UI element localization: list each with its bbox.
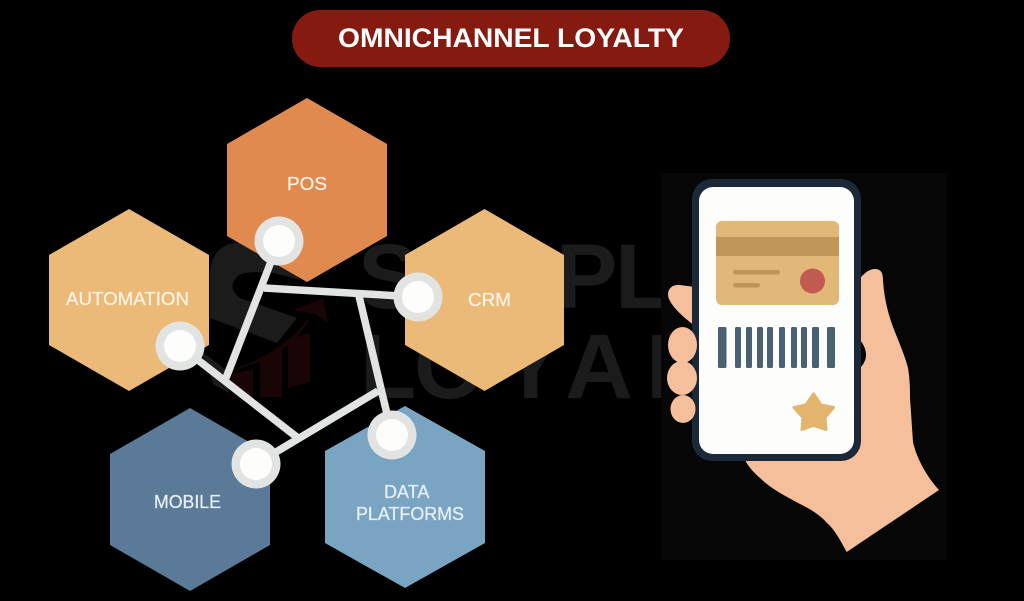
hexagon: POS (227, 98, 387, 282)
loyalty card (716, 221, 839, 305)
watermark: logo and brand name: L (646, 316, 702, 418)
hexagon: Mobile (110, 408, 270, 591)
node: Mobile (232, 440, 280, 488)
node: CRM (394, 272, 442, 322)
barcode (718, 327, 835, 368)
watermark: logo and brand name: L (360, 316, 416, 418)
hexagon: Data Platforms: PLATFORMS (356, 504, 464, 524)
hexagon: CRM: CRM (468, 290, 511, 310)
hexagon: POS: POS (287, 174, 327, 194)
watermark: logo and brand name: S (358, 226, 419, 328)
hexagon: Data Platforms: DATA (384, 482, 429, 502)
watermark: logo and brand name: P (556, 226, 617, 328)
watermark: logo and brand name: O (414, 316, 486, 418)
hexagon: Data Platforms (325, 406, 485, 588)
watermark: logo and brand name: Y (500, 316, 561, 418)
hexagon: CRM (405, 209, 564, 391)
node: Automation (156, 322, 204, 370)
hexagon: Automation (49, 209, 209, 391)
watermark: logo and brand name (200, 226, 702, 418)
hexagon: Automation: AUTOMATION (66, 289, 189, 309)
hand: palm and thumb (745, 269, 939, 552)
hand: index finger (668, 285, 695, 326)
hexagon: Mobile: MOBILE (154, 492, 221, 512)
connector network (180, 241, 418, 464)
phone body (692, 179, 866, 461)
title pill: OMNICHANNEL LOYALTY (338, 23, 684, 53)
icon: star (794, 394, 834, 430)
illustration panel: hand holding phone (661, 173, 947, 560)
title pill (292, 10, 730, 67)
hand: three fingers (667, 327, 697, 423)
watermark: logo and brand name: L (615, 226, 671, 328)
node: Data Platforms (368, 410, 416, 460)
node: POS (254, 216, 304, 266)
watermark: logo and brand name: A (565, 316, 633, 418)
